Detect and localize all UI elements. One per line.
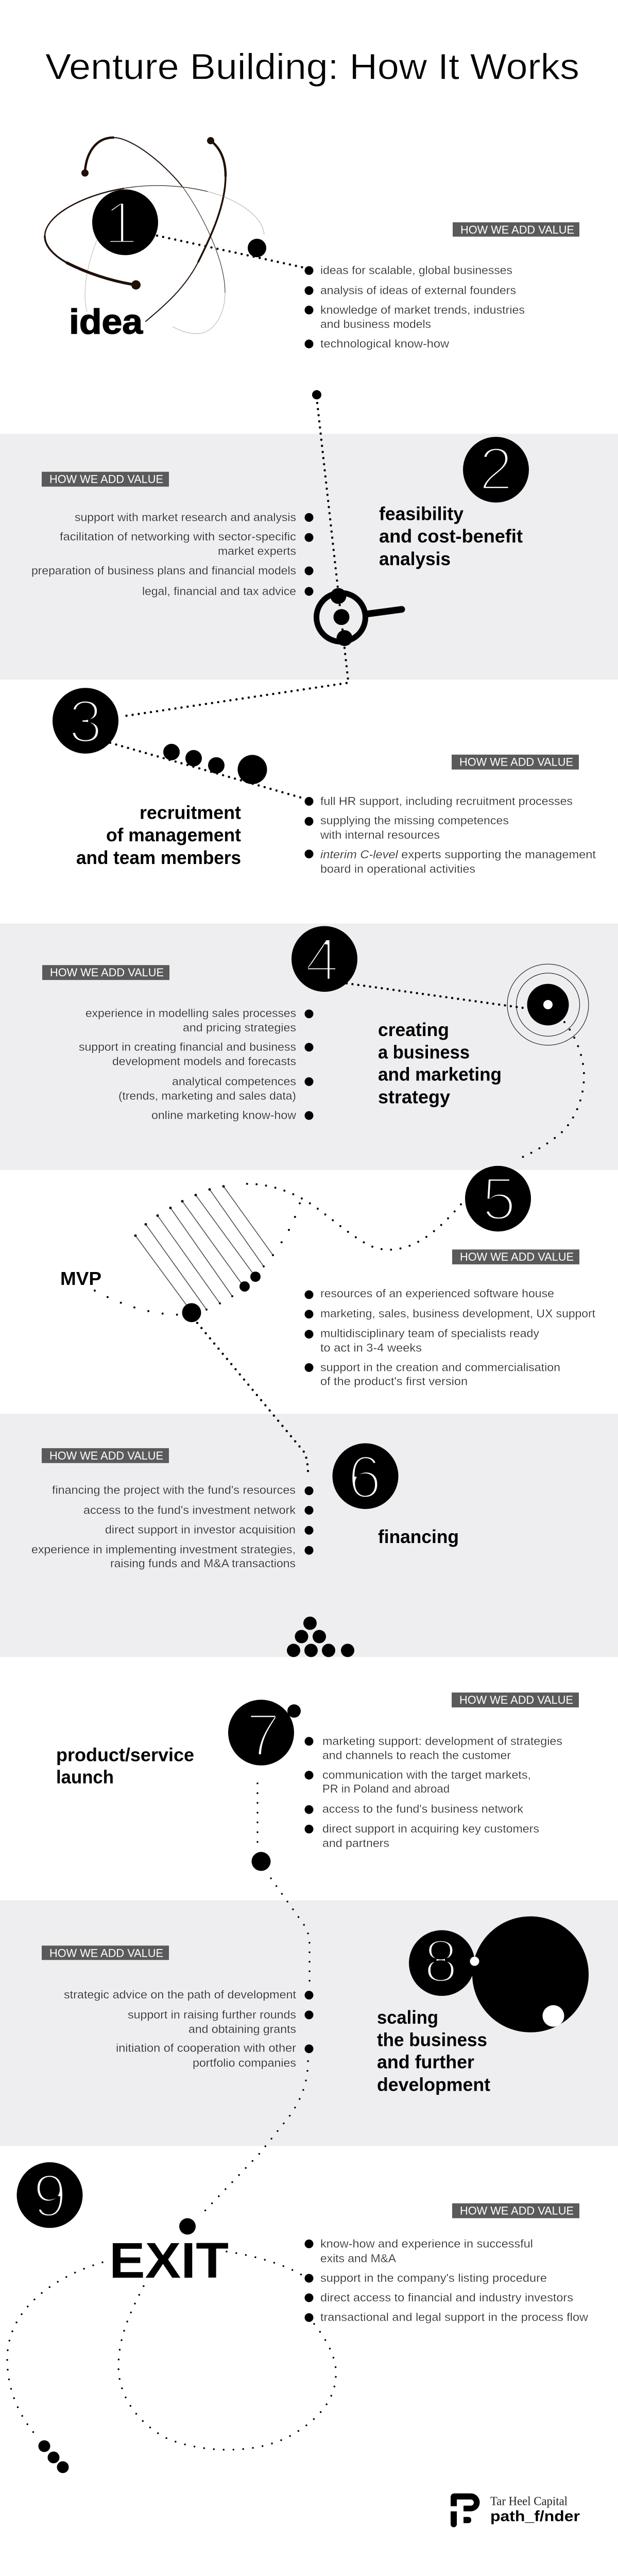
value list: technological know-how [320,337,449,350]
icon: pile of coins [287,1617,354,1657]
value list [31,511,313,598]
heading [378,1019,502,1107]
value list: support in raising further rounds [128,2008,296,2021]
value list: ideas for scalable, global businesses [320,264,512,277]
value list: to act in 3-4 weeks [320,1342,422,1354]
value list: with internal resources [320,828,440,841]
number badge 5: 5 [482,1165,516,1232]
number badge 5 [465,1165,531,1232]
number badge 9 [16,2162,82,2229]
value list: support with market research and analysis [75,511,296,523]
value list: facilitation of networking with sector-specific [60,530,296,543]
value list: support in creating financial and business [79,1041,296,1054]
heading: and cost-benefit [379,526,523,547]
step 7: launch [56,1692,579,1871]
value list: communication with the target markets, [322,1769,531,1782]
value list: analysis of ideas of external founders [320,284,516,297]
value list: support in the creation and commercialisation [320,1361,560,1374]
icon: atom orbits [45,137,264,334]
logo: Tar Heel Capital path_finder [451,2494,580,2527]
path end dot [312,390,321,399]
number badge 7: 7 [246,1701,280,1769]
value list [64,1988,314,2070]
number badge 2: 2 [479,435,513,503]
step 9: exit [16,2162,588,2473]
step 2: feasibility [31,435,529,646]
logo wordmark: path_f/nder [490,2508,580,2524]
number badge 8 [409,1927,475,1996]
value list: market experts [218,545,296,557]
icon: hatched MVP shape [134,1185,274,1322]
step 8: scaling [42,1917,589,2095]
value list: support in the company's listing procedure [320,2272,547,2284]
number badge 2 [463,435,529,503]
value list: full HR support, including recruitment processes [320,794,573,807]
number badge 9: 9 [33,2162,67,2229]
value list: financing the project with the fund's resources [52,1484,296,1497]
panel: step 4 background [0,924,618,1170]
heading: creating [378,1019,449,1040]
value list: and business models [320,318,431,331]
step 6: financing [31,1443,459,1657]
value list: strategic advice on the path of development [64,1988,296,2001]
value list: marketing support: development of strategies [322,1735,562,1748]
value list: multidisciplinary team of specialists ready [320,1327,539,1340]
step 1: idea [69,189,579,399]
value list: access to the fund's business network [322,1802,524,1815]
number badge 4 [291,925,357,993]
value list: resources of an experienced software house [320,1287,554,1300]
number badge 8: 8 [424,1927,458,1995]
value list: online marketing know-how [151,1109,296,1122]
panel: step 2 background [0,434,618,680]
value list: of the product's first version [320,1375,468,1387]
value list: analytical competences [172,1075,296,1088]
value list [305,1735,562,1850]
value list: access to the fund's investment network [83,1503,296,1516]
heading: of management [106,824,241,845]
heading: financing [378,1526,459,1547]
value list: experience in implementing investment strategies, [31,1543,296,1556]
step 3: recruitment [53,687,596,875]
value list: and channels to reach the customer [322,1749,511,1762]
heading: development [377,2074,490,2095]
value list: and partners [322,1837,389,1850]
number badge 4: 4 [305,925,339,993]
heading: and marketing [378,1064,502,1084]
number badge 6 [333,1443,399,1511]
panel: step 6 background [0,1414,618,1657]
heading: feasibility [379,503,464,524]
heading: and team members [76,847,241,868]
step 4: strategy [42,925,589,1122]
number badge 3: 3 [68,687,102,755]
icon: magnifying glass [316,588,402,646]
heading: and further [377,2052,474,2073]
heading: MVP: MVP [60,1268,101,1289]
value label: HOW WE ADD VALUE [460,1250,574,1263]
number badge 1 [92,189,158,257]
icon: white highlights [470,1957,564,2027]
heading: scaling [377,2007,438,2028]
value list: preparation of business plans and financial models [31,564,296,577]
heading: idea: idea [69,303,143,342]
icon: end dots [38,2440,69,2473]
value list [31,1484,313,1570]
value list: and obtaining grants [188,2023,296,2036]
value list: direct support in acquiring key customers [322,1822,539,1835]
number badge 7 [228,1700,294,1769]
value list: interim C-level experts supporting the management [320,848,596,861]
value label: HOW WE ADD VALUE [50,966,164,979]
heading: EXIT: EXIT [109,2232,229,2289]
value list: knowledge of market trends, industries [320,303,525,316]
number badge 1: 1 [104,189,138,257]
value list: raising funds and M&A transactions [110,1557,296,1570]
heading [377,2007,490,2095]
value list: board in operational activities [320,862,475,875]
logo text: Tar Heel Capital [490,2495,568,2508]
panel: step 8 background [0,1901,618,2146]
value list: exits and M&A [320,2252,396,2265]
heading: product/service [56,1744,194,1766]
value list: experience in modelling sales processes [85,1007,296,1020]
number badge 6: 6 [348,1443,382,1511]
value label: HOW WE ADD VALUE [460,223,574,236]
value label: HOW WE ADD VALUE [49,1946,163,1959]
value list: know-how and experience in successful [320,2237,533,2250]
icon: team dots [163,744,267,784]
value list [305,794,596,875]
value list: PR in Poland and abroad [322,1783,450,1795]
heading: strategy [378,1086,450,1107]
value list: development models and forecasts [112,1055,296,1068]
value list: direct support in investor acquisition [105,1523,296,1536]
heading: launch [56,1767,114,1788]
title: Venture Building: How It Works [45,47,579,87]
value list [305,1287,595,1387]
value list [305,264,525,350]
icon: launch dots [251,1704,301,1871]
value list [79,1007,313,1122]
number badge 3 [53,687,118,755]
value label: HOW WE ADD VALUE [49,473,163,486]
value list: portfolio companies [193,2057,296,2070]
value list: direct access to financial and industry investors [320,2291,573,2304]
value list: and pricing strategies [183,1021,296,1034]
icon: satellite dot [248,239,266,257]
value list: marketing, sales, business development, UX support [320,1307,595,1320]
step 5: MVP [60,1165,595,1387]
value list: initiation of cooperation with other [116,2042,296,2055]
value list: supplying the missing competences [320,814,509,827]
value label: HOW WE ADD VALUE [459,1693,573,1706]
value list [305,2237,588,2324]
heading [379,503,523,569]
heading: recruitment [140,802,241,823]
heading: analysis [379,548,451,569]
value label: HOW WE ADD VALUE [460,2205,574,2217]
icon: P mark [451,2494,480,2527]
value list: legal, financial and tax advice [142,585,296,598]
heading: the business [377,2029,487,2050]
heading [76,802,241,868]
value label: HOW WE ADD VALUE [459,756,573,769]
value list: (trends, marketing and sales data) [118,1089,296,1102]
value list: transactional and legal support in the process flow [320,2311,588,2324]
value label: HOW WE ADD VALUE [49,1449,163,1462]
heading: a business [378,1042,470,1063]
icon: target [507,964,589,1045]
heading [56,1744,194,1788]
icon: growing circle [472,1917,589,2032]
